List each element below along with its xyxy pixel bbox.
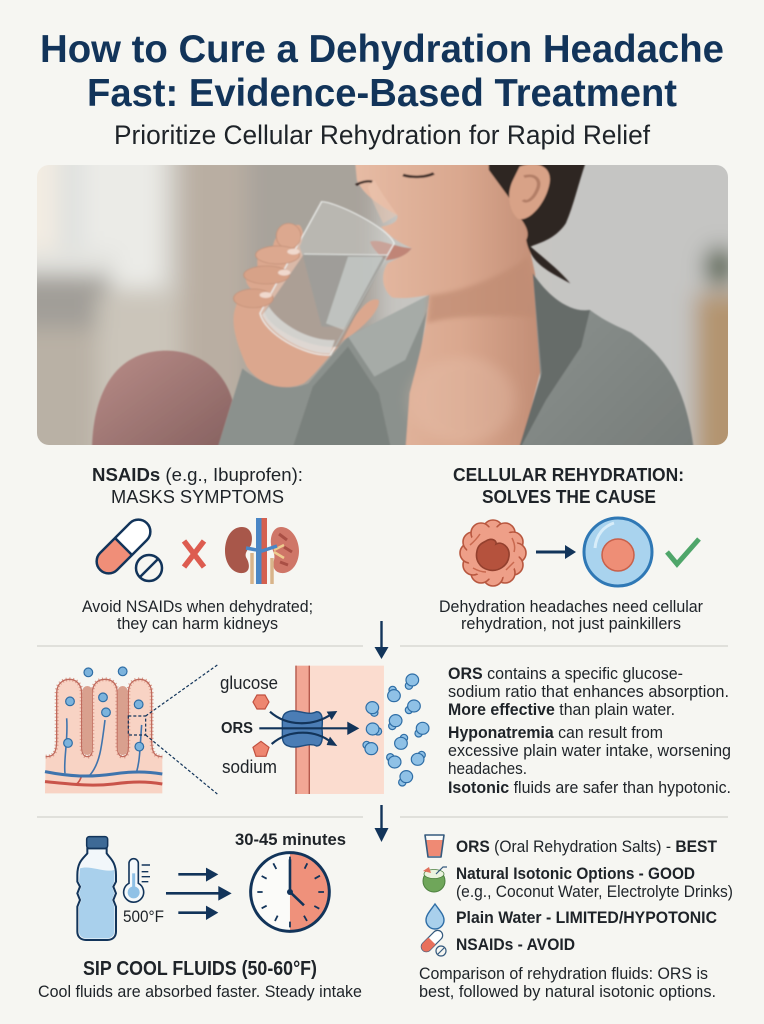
- panel: fluid comparison list: [419, 835, 733, 1001]
- text block: ORS explanation: headaches.: [448, 760, 527, 778]
- panel: sip cool fluids: [38, 830, 362, 1001]
- label: glucose: glucose: [220, 673, 278, 693]
- heading: sip cool fluids: SIP COOL FLUIDS (50-60°F): [83, 958, 317, 980]
- caption: avoid NSAIDs: they can harm kidneys: [117, 614, 278, 633]
- label: 30-45 minutes: 30-45 minutes: [235, 830, 346, 849]
- icon: green check: [667, 539, 699, 564]
- icon: red cross: [184, 541, 204, 567]
- title: [40, 28, 724, 115]
- icon: dehydrated cell: [460, 520, 526, 586]
- icon: hydrated cell: [584, 518, 652, 586]
- icon: tablet: [136, 555, 162, 581]
- icon: water drop: [426, 904, 444, 929]
- label: sodium: sodium: [222, 757, 277, 777]
- caption: comparison: Comparison of rehydration fluids: ORS is: [419, 965, 708, 983]
- heading: NSAIDs masks symptoms: [92, 465, 303, 507]
- text: natural isotonic options: Natural Isotonic Options - GOOD: [456, 865, 695, 883]
- heading: cellular rehydration: CELLULAR REHYDRATION:: [453, 465, 684, 485]
- title: How to Cure a Dehydration Headache: [40, 28, 724, 71]
- text block: ORS explanation: Hyponatremia can result from: [448, 724, 663, 742]
- arrow: down to absorption section: [374, 621, 388, 659]
- icon: thermometer: [124, 859, 150, 902]
- label: thermometer reading: 500°F: [123, 907, 164, 926]
- text block: ORS explanation: sodium ratio that enhances absorption.: [448, 683, 729, 701]
- heading: NSAIDs masks symptoms: MASKS SYMPTOMS: [111, 487, 284, 507]
- panel: ORS absorption: [45, 665, 731, 797]
- caption: cellular rehydration: Dehydration headaches need cellular: [439, 597, 703, 616]
- icon: pill capsule: [92, 515, 155, 578]
- title: Fast: Evidence-Based Treatment: [87, 72, 677, 115]
- photo: woman drinking a glass of water: [37, 165, 728, 445]
- caption: cool fluids: Cool fluids are absorbed faster. Steady intake: [38, 982, 362, 1001]
- text: natural isotonic options: (e.g., Coconut Water, Electrolyte Drinks): [456, 883, 733, 901]
- illustration: intestinal villi: [45, 665, 217, 794]
- caption: cellular rehydration: [439, 597, 703, 633]
- icon: water bottle: [77, 837, 116, 940]
- arrows: flow toward clock: [166, 868, 232, 920]
- heading: cellular rehydration: SOLVES THE CAUSE: [482, 487, 656, 507]
- text block: ORS explanation: ORS contains a specific glucose-: [448, 665, 683, 683]
- label: ORS: ORS: [221, 720, 253, 737]
- caption: cellular rehydration: rehydration, not just painkillers: [461, 614, 681, 633]
- arrow: down to cool fluids section: [374, 805, 388, 842]
- text: natural isotonic options: [456, 865, 733, 901]
- icon: small pill: [419, 928, 446, 956]
- heading: NSAIDs masks symptoms: NSAIDs (e.g., Ibuprofen):: [92, 465, 303, 485]
- caption: comparison: best, followed by natural isotonic options.: [419, 983, 716, 1001]
- icon: clock: [251, 853, 329, 931]
- icon: kidneys: [225, 518, 299, 584]
- icon: coconut: [423, 867, 447, 892]
- text block: ORS explanation: Isotonic fluids are safer than hypotonic.: [448, 779, 731, 797]
- subtitle: Prioritize Cellular Rehydration for Rapid Relief: [114, 120, 650, 150]
- panel: cellular rehydration: [439, 465, 703, 633]
- text block: ORS explanation: More effective than plain water.: [448, 701, 675, 719]
- text block: ORS explanation: excessive plain water intake, worsening: [448, 742, 731, 760]
- arrow: dehydrated to hydrated cell: [536, 545, 576, 559]
- heading: cellular rehydration: [453, 465, 684, 507]
- illustration: water molecules: [363, 674, 429, 786]
- illustration: membrane transporter: [253, 666, 384, 794]
- text block: ORS explanation: [448, 665, 731, 797]
- panel: NSAIDs: [82, 465, 313, 633]
- text: ORS best: ORS (Oral Rehydration Salts) - BEST: [456, 838, 717, 856]
- text: plain water: Plain Water - LIMITED/HYPOTONIC: [456, 909, 717, 927]
- caption: avoid NSAIDs: [82, 597, 313, 633]
- text: NSAIDs avoid: NSAIDs - AVOID: [456, 936, 575, 954]
- caption: comparison: [419, 965, 716, 1001]
- caption: avoid NSAIDs: Avoid NSAIDs when dehydrated;: [82, 597, 313, 616]
- icon: ORS cup: [425, 835, 444, 857]
